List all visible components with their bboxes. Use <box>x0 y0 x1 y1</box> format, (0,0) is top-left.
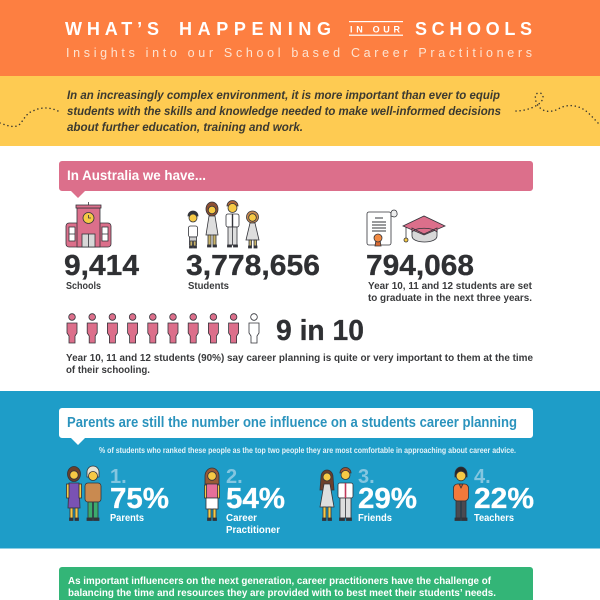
stat: teachers: 4. <box>474 466 491 488</box>
icon: teacher <box>454 467 468 520</box>
icon: diploma <box>367 210 397 246</box>
girl one <box>206 202 218 247</box>
stat: schools: 9,414 <box>64 250 139 282</box>
intro text <box>67 90 501 134</box>
stat: teachers: Teachers <box>474 512 514 524</box>
stat: friends: 3. <box>358 466 375 488</box>
girl two <box>246 211 259 248</box>
dotted path right <box>516 93 600 125</box>
intro band <box>0 76 600 146</box>
callout: green panel: As important influencers on the next generation, career practitioners have the challenge of <box>68 575 491 587</box>
pink banner: In Australia we have... <box>67 168 206 183</box>
title <box>65 19 532 39</box>
stat: career practitioner: Career <box>226 512 257 524</box>
stat: career practitioner: 2. <box>226 466 243 488</box>
stat: graduates: 794,068 <box>366 250 474 282</box>
stat: 9 in 10: 9 in 10 <box>276 315 364 347</box>
stat: parents: 1. <box>110 466 127 488</box>
stat: parents <box>110 466 169 524</box>
boy <box>188 211 198 248</box>
intro text: students with the skills and knowledge needed to make well-informed decisions <box>67 106 501 118</box>
icon: graduation cap <box>403 216 445 242</box>
stat: teachers <box>474 466 534 524</box>
pictogram: 9 in 10 people <box>67 314 259 343</box>
stat: graduates: to graduate in the next three years. <box>368 292 532 304</box>
stat: graduates: Year 10, 11 and 12 students are set <box>368 280 532 292</box>
stat: career practitioner: Practitioner <box>226 524 280 536</box>
header band <box>0 0 600 76</box>
stat: friends: 29% <box>358 483 417 515</box>
stat: schools: Schools <box>66 280 101 292</box>
intro text: In an increasingly complex environment, it is more important than ever to equip <box>67 90 500 102</box>
influence caption: % of students who ranked these people as the top two people they are most comfortable in approaching about career advice. <box>99 446 516 455</box>
influence heading banner <box>59 408 533 445</box>
influence heading banner: Parents are still the number one influence on a students career planning <box>67 415 517 431</box>
icon: school <box>66 202 111 247</box>
stat: career practitioner: 54% <box>226 483 285 515</box>
title: HAPPENING <box>179 19 331 39</box>
stat: parents: Parents <box>110 512 144 524</box>
stat: friends <box>358 466 417 524</box>
icon: students <box>188 201 259 248</box>
boy two <box>226 201 239 247</box>
subtitle: Insights into our School based Career Practitioners <box>66 46 532 60</box>
panel: influences <box>0 391 600 548</box>
stat: parents: 75% <box>110 483 169 515</box>
stat: 9 in 10: Year 10, 11 and 12 students (90%) say career planning is quite or very important to them at the time <box>66 352 533 364</box>
title: SCHOOLS <box>415 19 532 39</box>
intro text: about further education, training and work. <box>67 122 303 134</box>
stat: career practitioner <box>226 466 285 536</box>
icon: friends <box>320 468 353 520</box>
stat: 9 in 10: of their schooling. <box>66 364 150 376</box>
icon: parents <box>66 466 101 520</box>
pink banner <box>59 161 533 198</box>
callout: green panel: balancing the time and resources they are provided with to best meet their students’ needs. <box>68 587 496 599</box>
dotted path left <box>0 108 58 126</box>
stat: friends: Friends <box>358 512 392 524</box>
stat: 9 in 10 <box>66 315 533 376</box>
stat: graduates <box>366 250 532 304</box>
stat: students: Students <box>188 280 229 292</box>
title: WHAT’S <box>65 19 159 39</box>
callout: green panel <box>59 567 533 600</box>
stat: teachers: 22% <box>474 483 534 515</box>
icon: career practitioner <box>204 468 220 520</box>
stat: students: 3,778,656 <box>186 250 320 282</box>
title: IN OUR <box>350 24 400 34</box>
